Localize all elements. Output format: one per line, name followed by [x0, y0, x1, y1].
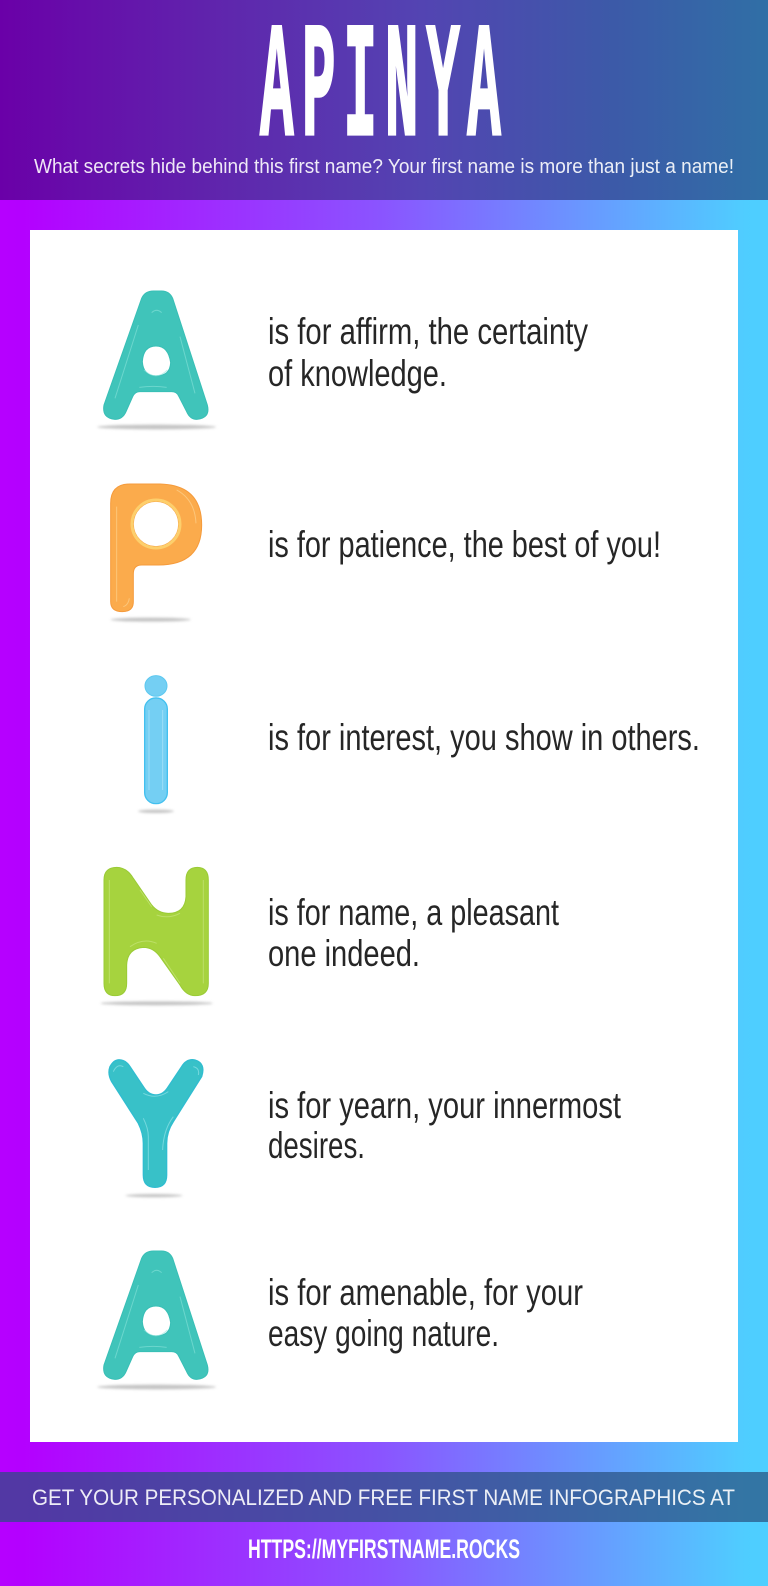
icon: letter Y teal-blue [109, 1060, 203, 1197]
description A: is for affirm, the certainty [268, 311, 588, 352]
footer call to action: GET YOUR PERSONALIZED AND FREE FIRST NAME INFOGRAPHICS AT [32, 1485, 735, 1510]
description A second: easy going nature. [268, 1313, 499, 1354]
description Y: desires. [268, 1125, 365, 1166]
description A second [268, 1272, 583, 1354]
row P: patience [111, 484, 661, 622]
icon: letter A teal second [97, 1251, 216, 1389]
description Y [268, 1085, 622, 1166]
row N: name [101, 867, 560, 1005]
description A [268, 311, 588, 394]
footer band [0, 1472, 768, 1522]
white content panel [30, 230, 738, 1442]
icon: letter i blue [138, 676, 174, 813]
row I: interest [138, 676, 700, 813]
subtitle: What secrets hide behind this first name? Your first name is more than just a name! [34, 156, 734, 178]
row Y: yearn [109, 1060, 622, 1197]
row A: affirm [97, 291, 588, 429]
icon: letter N green [101, 867, 213, 1005]
icon: letter A teal [97, 291, 216, 429]
description A second: is for amenable, for your [268, 1272, 583, 1313]
footer url: HTTPS://MYFIRSTNAME.ROCKS [248, 1534, 520, 1564]
row A: amenable [97, 1251, 583, 1389]
description N: one indeed. [268, 933, 420, 974]
description Y: is for yearn, your innermost [268, 1085, 622, 1126]
description N [268, 892, 560, 974]
description N: is for name, a pleasant [268, 892, 560, 933]
description P: is for patience, the best of you! [268, 524, 661, 565]
title: APINYA [260, 0, 501, 183]
icon: letter P orange [111, 484, 202, 622]
description A: of knowledge. [268, 353, 447, 394]
header band [0, 0, 768, 200]
